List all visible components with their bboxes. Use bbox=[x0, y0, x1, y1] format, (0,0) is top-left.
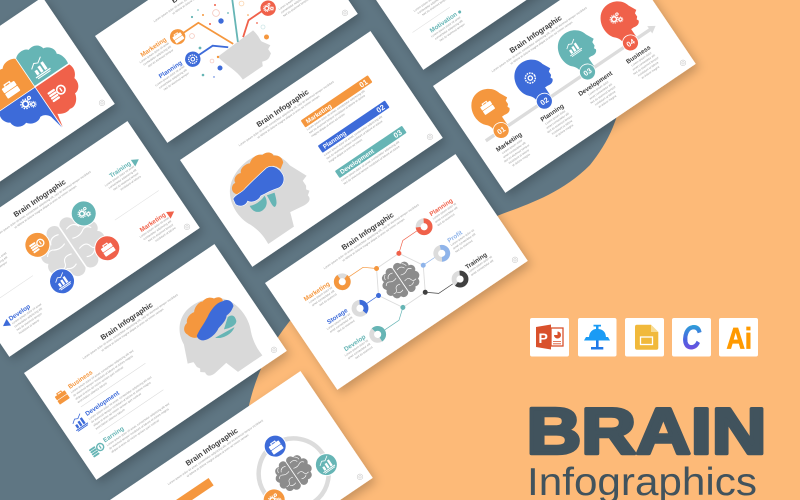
page marker bbox=[679, 59, 687, 67]
label: training bbox=[108, 155, 141, 181]
icon: coins bbox=[89, 442, 106, 458]
step 04 head bbox=[594, 0, 649, 50]
text block: Lorem ipsum dolor sit amet bbox=[430, 15, 461, 38]
text block bbox=[430, 15, 466, 45]
node: briefcase bbox=[167, 26, 188, 47]
bar: planning: 02 bbox=[375, 103, 387, 115]
brain quadrant: teal bbox=[14, 33, 68, 86]
circle: chart bbox=[45, 264, 79, 299]
text block bbox=[104, 164, 142, 197]
page marker bbox=[511, 256, 519, 264]
step 02 number bbox=[533, 90, 555, 112]
title: Brain Infographic bbox=[508, 13, 563, 55]
page marker bbox=[270, 346, 278, 354]
bar: development: Development bbox=[339, 147, 376, 176]
text block: amet consectetur elit bbox=[434, 205, 459, 224]
text block: amet consectetur elit bbox=[502, 141, 527, 159]
subtitle: Lorem ipsum dolor sit amet, consectetur adipiscing elit, sed do eiusmod tempor incididunt bbox=[167, 418, 264, 486]
text block bbox=[498, 136, 535, 170]
text block: amet consectetur elit bbox=[311, 289, 335, 307]
page marker bbox=[98, 99, 106, 107]
text block: sed do eiusmod bbox=[318, 292, 338, 307]
line: blue bbox=[193, 39, 228, 67]
text block: Lorem ipsum dolor sit amet bbox=[154, 64, 186, 87]
text block bbox=[154, 64, 190, 94]
icon: chart bbox=[27, 56, 52, 80]
bar: marketing: Marketing bbox=[305, 103, 333, 125]
panel: head timeline slide bbox=[433, 0, 696, 193]
title: Brain Infographic bbox=[99, 300, 154, 342]
label: marketing bbox=[139, 206, 176, 236]
label: develop: Develop bbox=[8, 303, 32, 323]
bar: development: 03 bbox=[392, 128, 404, 140]
decorative dots bbox=[190, 1, 269, 78]
subtitle: Lorem ipsum dolor sit amet, consectetur adipiscing elit, sed do eiusmod tempor incididunt bbox=[323, 203, 420, 270]
text block: do eiusmod tempor incididunt ut labore et dolore magna bbox=[72, 354, 134, 397]
page marker bbox=[183, 223, 191, 231]
text block bbox=[450, 228, 479, 254]
label: planning: Planning bbox=[540, 103, 566, 124]
step 01 number bbox=[490, 119, 512, 142]
title: BRAIN: BRAIN bbox=[526, 394, 766, 468]
text block: sed do eiusmod tempor bbox=[112, 171, 140, 191]
panel: top partial slide bbox=[351, 0, 614, 70]
hexagon bbox=[365, 246, 436, 315]
text block: sed do eiusmod bbox=[436, 212, 456, 227]
text block: consectetur adipiscing elit bbox=[142, 219, 172, 241]
icon: coins bbox=[47, 83, 68, 102]
text block: sed do eiusmod tempor incididunt ut labore et dolore bbox=[308, 93, 366, 135]
text block: Lorem ipsum dolor sit amet, consectetur adipiscing elit sed bbox=[88, 375, 153, 421]
label: profit: Profit bbox=[446, 229, 465, 245]
step 04 number: 04 bbox=[625, 36, 637, 49]
text block: Lorem ipsum dolor sit bbox=[326, 312, 351, 331]
circle: coins bbox=[20, 227, 55, 262]
brain bbox=[269, 449, 318, 497]
text block: incididunt ut labore bbox=[594, 89, 617, 107]
icon: briefcase bbox=[54, 389, 70, 405]
icon: canva bbox=[672, 318, 711, 357]
text block: Lorem ipsum dolor sit amet bbox=[11, 302, 42, 325]
brain quadrant: orange bbox=[0, 57, 34, 113]
text block: sed do eiusmod tempor bbox=[147, 48, 174, 68]
text block bbox=[326, 312, 356, 338]
subtitle: Lorem ipsum dolor sit amet, consectetur adipiscing elit, sed do eiusmod tempor incididunt bbox=[491, 6, 588, 73]
brain: orange lobe bbox=[223, 145, 286, 198]
label: training: Training bbox=[464, 251, 489, 271]
label: planning: Planning bbox=[158, 59, 184, 80]
subtitle: ut labore et dolore magna aliqua ut enim ad minim veniam bbox=[256, 94, 321, 139]
text block: amet consectetur elit bbox=[589, 82, 613, 101]
donut: training bbox=[449, 268, 471, 290]
text block: amet consectetur elit bbox=[470, 258, 494, 277]
icon: powerpoint: P bbox=[538, 330, 548, 346]
text block: Lorem ipsum dolor bbox=[630, 51, 652, 67]
subtitle: ut labore et dolore magna aliqua ut enim ad minim veniam bbox=[13, 184, 78, 229]
bar: marketing: 01 bbox=[357, 77, 369, 90]
orange bar bbox=[142, 478, 214, 500]
text block: et dolore magna bbox=[554, 123, 574, 138]
text block bbox=[11, 302, 49, 335]
brain bbox=[376, 256, 426, 304]
ring bbox=[245, 425, 342, 500]
text block: incididunt ut labore bbox=[508, 148, 530, 165]
label: marketing: Marketing bbox=[303, 281, 331, 303]
text block: et dolore magna bbox=[511, 152, 531, 167]
head silhouette bbox=[217, 27, 278, 84]
title: Brain Infographic bbox=[255, 87, 310, 129]
panel: brain bars slide bbox=[180, 31, 443, 267]
text block: Lorem ipsum dolor sit amet, consectetur adipiscing elit bbox=[323, 115, 383, 157]
step 03 number: 03 bbox=[582, 66, 593, 78]
text block bbox=[432, 202, 462, 227]
text block: aliqua ut enim ad minim veniam quis nostrud bbox=[74, 365, 124, 401]
title: Brain Infographic bbox=[184, 426, 240, 468]
label: marketing: Marketing bbox=[495, 131, 524, 154]
connector: red bbox=[394, 231, 422, 253]
label: earning: Earning bbox=[102, 425, 126, 444]
text block: amet consectetur elit bbox=[545, 111, 570, 130]
panel: four colour brain slide bbox=[0, 0, 115, 233]
title: Brain Infographic bbox=[340, 210, 395, 252]
brain: blue lobe bbox=[188, 297, 241, 343]
text block: sed do eiusmod tempor bbox=[147, 223, 174, 243]
circle: gears bbox=[259, 485, 289, 500]
text block: sed do eiusmod tempor bbox=[632, 56, 660, 76]
text block: Lorem ipsum dolor sit amet bbox=[139, 216, 170, 239]
text block: sed do eiusmod bbox=[454, 239, 474, 254]
text block: sed do eiusmod tempor bbox=[589, 85, 617, 105]
connector: black bbox=[425, 277, 453, 299]
text block: sed do eiusmod tempor bbox=[438, 22, 466, 42]
step 01 number: 01 bbox=[495, 124, 507, 137]
bar: marketing bbox=[301, 75, 373, 128]
text block: incididunt ut labore bbox=[18, 318, 40, 335]
circle: gears bbox=[66, 196, 101, 231]
text block: do eiusmod tempor incididunt ut labore et dolore magna bbox=[108, 407, 170, 450]
donut: storage bbox=[349, 297, 371, 320]
text block bbox=[585, 78, 621, 111]
bar: development bbox=[335, 126, 407, 179]
text block: Lorem ipsum dolor sit amet, consectetur adipiscing elit bbox=[340, 140, 400, 182]
label: development: Development bbox=[577, 69, 615, 98]
hexagon nodes bbox=[362, 242, 440, 318]
head silhouette bbox=[162, 284, 269, 393]
text block: amet consectetur elit bbox=[452, 232, 476, 250]
label: development: Development bbox=[84, 389, 122, 418]
subtitle: Lorem ipsum dolor sit amet, consectetur adipiscing elit, sed do eiusmod tempor incididunt bbox=[238, 80, 335, 147]
text block: amet consectetur elit bbox=[347, 342, 371, 360]
text block: Lorem ipsum dolor bbox=[544, 109, 566, 126]
text block: Lorem ipsum dolor sit bbox=[432, 202, 457, 220]
title: Brain Infographic bbox=[12, 177, 67, 219]
step 02 number: 02 bbox=[538, 95, 550, 107]
line: teal bbox=[199, 0, 267, 42]
text block: exercitation ullamco laboris bbox=[77, 381, 108, 404]
text block bbox=[344, 338, 374, 364]
text block: Lorem ipsum dolor sit amet, consectetur adipiscing elit sed bbox=[70, 349, 135, 394]
text block: sed do eiusmod tempor bbox=[546, 114, 573, 134]
text block bbox=[413, 0, 448, 19]
text block: Lorem ipsum dolor sit bbox=[308, 285, 333, 304]
text block: incididunt ut labore bbox=[551, 119, 574, 136]
subtitle: ut labore et dolore magna aliqua ut enim ad minim veniam bbox=[341, 217, 406, 262]
circle: briefcase bbox=[90, 231, 125, 266]
text block: consectetur adipiscing elit bbox=[108, 168, 137, 190]
page marker bbox=[426, 133, 434, 141]
text block bbox=[139, 41, 174, 71]
step 03 number bbox=[576, 61, 599, 83]
icon: google slides bbox=[625, 318, 664, 356]
text block: Lorem ipsum dolor bbox=[501, 138, 523, 155]
text block bbox=[542, 107, 578, 141]
label: marketing: Marketing bbox=[139, 36, 168, 59]
icon: briefcase bbox=[0, 79, 21, 99]
head silhouette bbox=[216, 138, 326, 249]
bar: planning: Planning bbox=[322, 130, 348, 151]
timeline arrow bbox=[483, 22, 658, 145]
software icons bbox=[530, 318, 758, 357]
text block: sed do eiusmod tempor incididunt ut labore et dolore bbox=[325, 119, 384, 160]
connector: blue bbox=[366, 296, 379, 304]
label: planning: Planning bbox=[428, 197, 454, 218]
text block: exercitation ullamco laboris bbox=[95, 407, 126, 431]
text block: sed do eiusmod tempor incididunt ut labore et dolore bbox=[342, 144, 401, 186]
label: marketing: Marketing bbox=[139, 211, 167, 234]
text block: do eiusmod tempor incididunt ut labore et dolore magna bbox=[90, 380, 152, 424]
subtitle: ut labore et dolore magna aliqua ut enim ad minim veniam bbox=[100, 307, 165, 352]
text block: amet consectetur elit bbox=[631, 53, 656, 71]
circle: briefcase bbox=[260, 431, 290, 461]
panel: network slide bbox=[265, 154, 528, 390]
brain: blue lobe bbox=[228, 162, 288, 213]
node: target bbox=[182, 48, 203, 70]
page marker bbox=[341, 9, 349, 17]
text block: consectetur adipiscing elit bbox=[158, 68, 188, 90]
text block: Lorem ipsum dolor sit bbox=[468, 255, 493, 273]
text block: aliqua ut enim ad minim veniam quis nostrud bbox=[110, 418, 160, 454]
text block: sed do eiusmod tempor bbox=[163, 71, 190, 91]
donut: develop bbox=[368, 325, 387, 344]
text block: magna aliqua ut enim ad minim bbox=[310, 112, 346, 138]
donut: profit bbox=[431, 243, 452, 264]
text block: Lorem ipsum dolor sit bbox=[450, 228, 475, 247]
text block: consectetur adipiscing elit bbox=[142, 45, 172, 66]
brain quadrant: blue bbox=[0, 88, 62, 153]
text block: et dolore magna bbox=[598, 94, 617, 109]
label: training: Training bbox=[108, 160, 133, 180]
brain quadrant: red bbox=[36, 64, 97, 127]
subtitle: ut labore et dolore magna aliqua ut enim ad minim veniam bbox=[509, 20, 574, 65]
subtitle: ut labore et dolore magna aliqua ut enim ad minim veniam bbox=[186, 433, 250, 478]
connector: teal bbox=[380, 307, 408, 330]
icon: illustrator bbox=[719, 318, 758, 356]
icon: illustrator: Ai bbox=[726, 322, 752, 356]
line: orange bbox=[178, 13, 233, 67]
step 02 head bbox=[507, 51, 563, 108]
text block: Lorem ipsum dolor sit amet, consectetur adipiscing elit sed bbox=[106, 402, 170, 447]
label: develop bbox=[0, 303, 33, 329]
page marker bbox=[356, 473, 364, 481]
panel: head with list slide bbox=[24, 244, 287, 480]
label: business: Business bbox=[67, 369, 95, 391]
icon: keynote bbox=[578, 318, 616, 356]
donut: marketing bbox=[332, 271, 353, 292]
text block bbox=[308, 285, 338, 311]
panel: exploding head slide bbox=[95, 0, 358, 143]
text block: Lorem ipsum dolor sit bbox=[344, 338, 369, 357]
label: business: Business bbox=[625, 44, 653, 66]
text block: Lorem ipsum dolor sit amet, consectetur adipiscing elit bbox=[306, 89, 366, 131]
label: develop: Develop bbox=[343, 334, 367, 353]
text block: incididunt ut labore bbox=[119, 174, 142, 191]
text block bbox=[0, 251, 12, 280]
text block: aliqua ut enim ad minim veniam quis nostrud bbox=[92, 392, 142, 427]
panel: ring slide bbox=[110, 371, 373, 500]
brain: teal lobe bbox=[210, 314, 241, 342]
donut: planning bbox=[413, 215, 435, 238]
text block: sed do eiusmod bbox=[354, 345, 374, 360]
text block bbox=[628, 49, 664, 82]
bar: planning bbox=[318, 100, 390, 153]
text block: Lorem ipsum dolor sit amet bbox=[104, 164, 135, 187]
label: motivation: Motivation bbox=[429, 11, 459, 35]
text block: sed do eiusmod tempor bbox=[15, 312, 43, 332]
node: gears bbox=[257, 0, 279, 19]
text block: Lorem ipsum dolor sit amet bbox=[139, 41, 170, 64]
icon: gears bbox=[19, 95, 37, 113]
circle: chart bbox=[311, 449, 342, 480]
step 03 head bbox=[551, 22, 607, 79]
text block: amet consectetur elit bbox=[329, 315, 353, 334]
label: storage: Storage bbox=[326, 307, 350, 326]
text block: incididunt ut labore bbox=[637, 60, 660, 77]
step 04 number bbox=[619, 32, 642, 54]
icon: powerpoint bbox=[530, 318, 569, 356]
text block: consectetur adipiscing elit bbox=[434, 19, 464, 41]
connector: light blue bbox=[423, 257, 435, 265]
line: red bbox=[237, 7, 274, 37]
subtitle: Lorem ipsum dolor sit amet, consectetur adipiscing elit, sed do eiusmod tempor incididunt bbox=[82, 293, 179, 360]
text block: incididunt ut labore bbox=[154, 226, 177, 243]
connector: orange bbox=[349, 261, 377, 284]
text block: et dolore magna bbox=[641, 65, 660, 80]
step 01 head bbox=[464, 80, 520, 138]
text block: consectetur adipiscing elit bbox=[13, 307, 43, 328]
text block: sed do eiusmod bbox=[336, 318, 356, 333]
brain: orange lobe bbox=[176, 291, 232, 342]
text block: magna aliqua ut enim ad minim bbox=[328, 137, 364, 164]
brain: teal lobe bbox=[250, 190, 281, 218]
text block: Lorem ipsum dolor bbox=[587, 80, 609, 96]
text block: sed do eiusmod tempor bbox=[503, 143, 530, 163]
panel: grey brain slide bbox=[0, 121, 200, 357]
icon: canva: C bbox=[682, 319, 701, 357]
icon: chart bbox=[70, 413, 89, 432]
text block bbox=[139, 216, 177, 249]
brain illustration bbox=[29, 205, 115, 289]
